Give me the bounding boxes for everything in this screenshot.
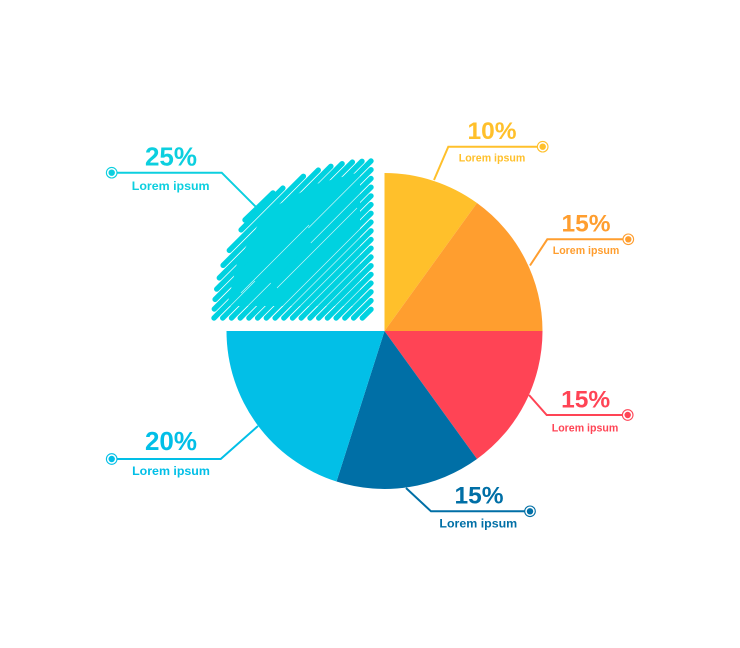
slice: yellow 10% xyxy=(384,173,477,331)
callout: 20% xyxy=(106,426,258,478)
marker xyxy=(106,167,117,178)
leader line xyxy=(434,147,538,180)
value: 20% xyxy=(145,426,197,456)
value: 10% xyxy=(467,118,517,145)
value: 15% xyxy=(561,211,611,238)
callout: red 15% xyxy=(529,386,633,435)
slice: orange 15% xyxy=(384,203,542,331)
pie chart xyxy=(214,161,542,489)
value: 15% xyxy=(561,386,610,413)
label: Lorem ipsum xyxy=(132,464,210,478)
leader line xyxy=(117,173,257,208)
marker xyxy=(106,454,117,464)
slice: dark blue 15% xyxy=(336,331,477,489)
marker xyxy=(525,506,535,517)
callout: 25% xyxy=(106,142,257,208)
marker xyxy=(537,141,548,152)
callout: dark blue 15% xyxy=(406,482,535,531)
leader line xyxy=(530,239,623,266)
leader line xyxy=(529,395,622,415)
slice: scribbled teal 25% xyxy=(214,161,371,318)
label: Lorem ipsum xyxy=(552,423,618,435)
leader line xyxy=(117,426,258,459)
value: 15% xyxy=(454,482,504,509)
leader line xyxy=(406,488,525,511)
slice: red 15% xyxy=(384,331,542,459)
callout: 10% xyxy=(434,118,548,180)
marker xyxy=(622,410,633,420)
slice: blue 20% xyxy=(226,331,384,482)
marker xyxy=(623,234,634,245)
label: Lorem ipsum xyxy=(459,153,525,165)
label: Lorem ipsum xyxy=(132,179,210,193)
label: Lorem ipsum xyxy=(439,517,517,531)
value: 25% xyxy=(145,142,197,172)
label: Lorem ipsum xyxy=(553,245,619,257)
callout: orange 15% xyxy=(530,211,634,266)
